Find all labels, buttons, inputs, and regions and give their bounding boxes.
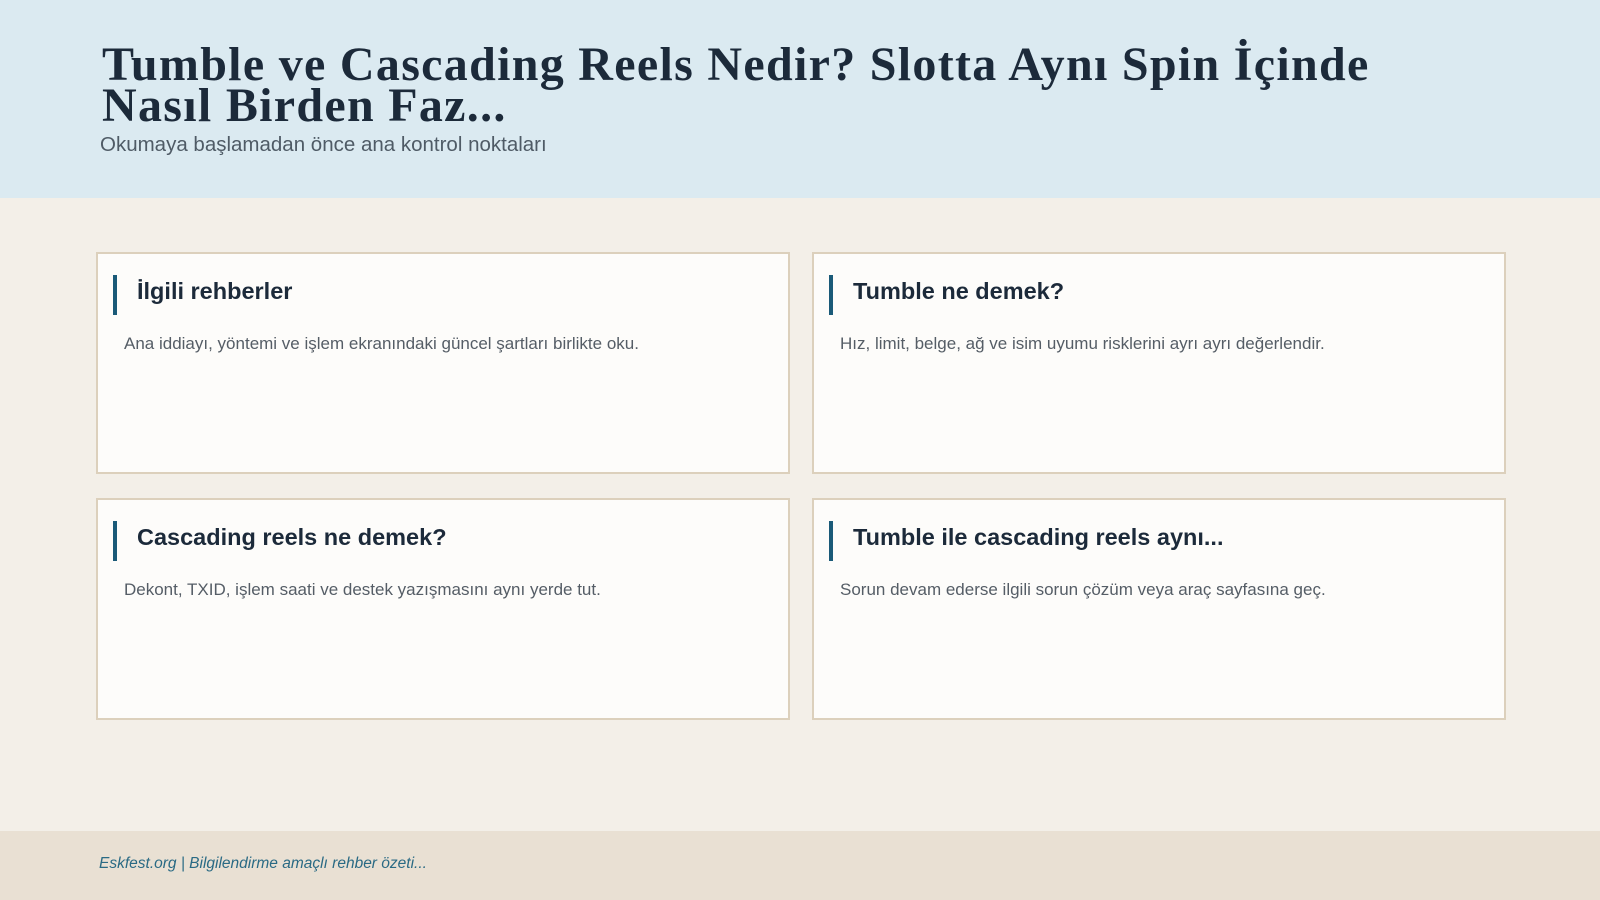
heading: Tumble ile cascading reels aynı... (853, 524, 1224, 550)
panel: ilgili rehberler (96, 252, 790, 474)
header (0, 0, 1600, 198)
text: Ana iddiayı, yöntemi ve işlem ekranındaki güncel şartları birlikte oku. (124, 334, 639, 353)
title: Nasıl Birden Faz... (102, 79, 507, 132)
title (102, 38, 1370, 132)
heading: İlgili rehberler (137, 278, 292, 304)
footer text: Eskfest.org | Bilgilendirme amaçlı rehber özeti... (99, 855, 427, 872)
panel: tumble (812, 252, 1506, 474)
title: Tumble ve Cascading Reels Nedir? Slotta Aynı Spin İçinde (102, 38, 1370, 91)
text: Sorun devam ederse ilgili sorun çözüm veya araç sayfasına geç. (840, 580, 1326, 599)
heading: Tumble ne demek? (853, 278, 1064, 304)
footer (0, 831, 1600, 900)
text: Hız, limit, belge, ağ ve isim uyumu risklerini ayrı ayrı değerlendir. (840, 334, 1325, 353)
panel: cascading (96, 498, 790, 720)
subtitle: Okumaya başlamadan önce ana kontrol noktaları (100, 133, 547, 156)
text: Dekont, TXID, işlem saati ve destek yazışmasını aynı yerde tut. (124, 580, 601, 599)
heading: Cascading reels ne demek? (137, 524, 447, 550)
panel: same (812, 498, 1506, 720)
